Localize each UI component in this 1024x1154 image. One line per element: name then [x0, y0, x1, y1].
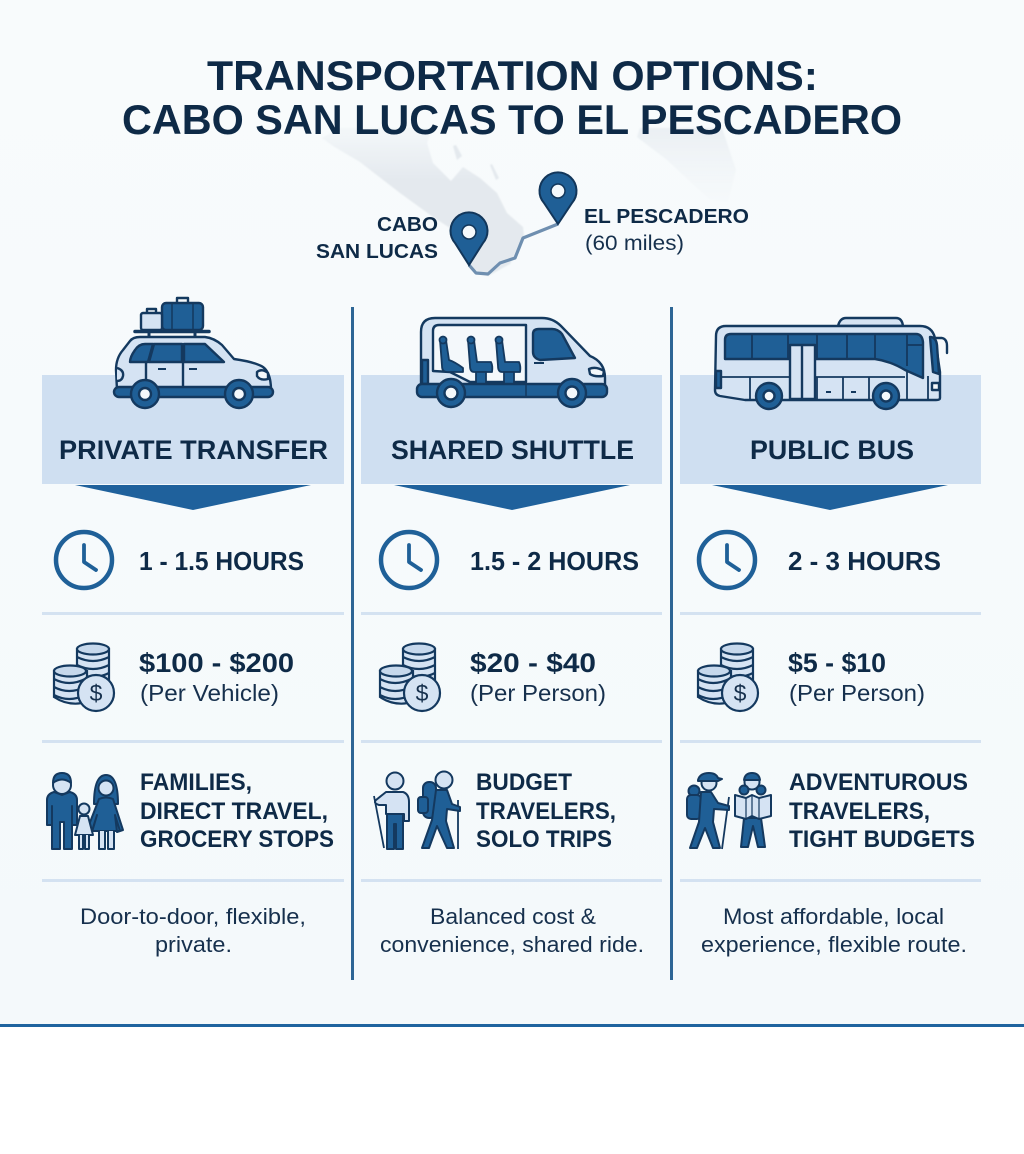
header band: [361, 375, 662, 484]
best for: TIGHT BUDGETS: [789, 826, 975, 853]
best for: DIRECT TRAVEL,: [140, 798, 328, 825]
label: Cabo San Lucas: SAN LUCAS: [316, 240, 438, 263]
icon: hikers: [374, 772, 460, 849]
travel time: 1.5 - 2 HOURS: [470, 546, 639, 576]
icon: clock: [699, 532, 755, 588]
best for: ADVENTUROUS: [789, 769, 968, 796]
description: convenience, shared ride.: [380, 932, 644, 957]
heading: SHARED SHUTTLE: [391, 435, 634, 465]
panel: public bus: [680, 318, 981, 957]
row dividers: [42, 614, 981, 880]
icon: coins: $: [90, 680, 103, 706]
cost: (Per Person): [789, 680, 925, 706]
pin: Cabo San Lucas: [450, 212, 488, 265]
heading: PRIVATE TRANSFER: [59, 435, 328, 465]
title: TRANSPORTATION OPTIONS:: [207, 52, 818, 99]
bottom rule: [0, 1024, 1024, 1027]
icon: coins: [380, 644, 440, 711]
route line: [469, 224, 558, 274]
icon: family: [47, 773, 123, 849]
description: [380, 904, 644, 957]
description: experience, flexible route.: [701, 932, 967, 957]
chevron: [394, 485, 630, 510]
panel: shared shuttle: [361, 318, 662, 957]
icon: clock: [381, 532, 437, 588]
title: [122, 52, 902, 143]
icon: coins: $: [416, 680, 429, 706]
description: Door-to-door, flexible,: [80, 904, 306, 929]
pin: El Pescadero: [540, 172, 576, 224]
icon: car with luggage: [114, 298, 273, 408]
travel time: 1 - 1.5 HOURS: [139, 546, 304, 576]
best for: TRAVELERS,: [476, 798, 616, 825]
chevron: [712, 485, 948, 510]
cost: [470, 648, 606, 706]
best for: BUDGET: [476, 769, 572, 796]
icon: coins: [54, 644, 114, 711]
best for: [476, 769, 616, 853]
cost: $100 - $200: [139, 648, 294, 678]
panel: private transfer: [42, 298, 344, 957]
best for: [140, 769, 334, 853]
chevron: [75, 485, 311, 510]
icon: shuttle van: [417, 318, 607, 407]
cost: [139, 648, 294, 706]
best for: [789, 769, 975, 853]
column dividers: [351, 307, 354, 980]
icon: coins: [698, 644, 758, 711]
icon: clock: [56, 532, 112, 588]
icon: backpacker and map reader: [687, 773, 771, 849]
best for: FAMILIES,: [140, 769, 252, 796]
best for: TRAVELERS,: [789, 798, 930, 825]
cost: [788, 648, 925, 706]
description: private.: [155, 932, 232, 957]
label: Cabo San Lucas: CABO: [377, 213, 438, 236]
label: El Pescadero: EL PESCADERO: [584, 205, 749, 228]
cost: (Per Person): [470, 680, 606, 706]
route map: [316, 128, 749, 276]
icon: bus: [715, 318, 947, 409]
header band: [680, 375, 981, 484]
cost: $5 - $10: [788, 648, 886, 678]
travel time: 2 - 3 HOURS: [788, 546, 941, 576]
label: El Pescadero: [584, 205, 749, 255]
heading: PUBLIC BUS: [750, 435, 914, 465]
description: [80, 904, 306, 957]
header band: [42, 375, 344, 484]
description: [701, 904, 967, 957]
icon: coins: $: [734, 680, 747, 706]
map land: [322, 128, 736, 276]
best for: GROCERY STOPS: [140, 826, 334, 853]
cost: $20 - $40: [470, 648, 596, 678]
label: Cabo San Lucas: [316, 213, 438, 263]
best for: SOLO TRIPS: [476, 826, 612, 853]
description: Most affordable, local: [723, 904, 944, 929]
cost: (Per Vehicle): [140, 680, 279, 706]
label: El Pescadero: (60 miles): [585, 232, 684, 255]
description: Balanced cost &: [430, 904, 596, 929]
title: CABO SAN LUCAS TO EL PESCADERO: [122, 96, 902, 143]
